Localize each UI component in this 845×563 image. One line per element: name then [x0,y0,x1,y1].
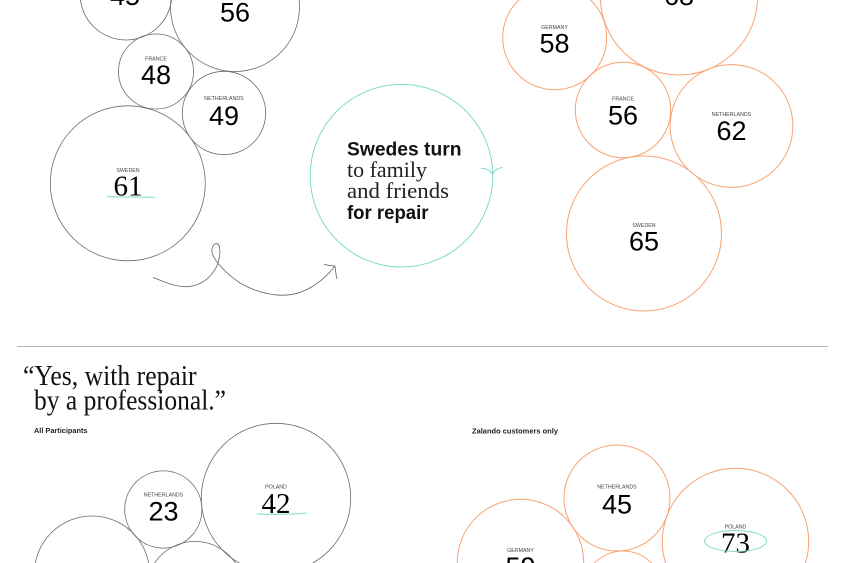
bubble: Netherlands 62 [670,65,793,187]
bubble: 45 [80,0,172,40]
bubble: Sweden 61: SWEDEN [116,168,140,174]
heading: Yes, with repair by a professional [23,361,226,416]
bubble: Poland 73: POLAND [725,525,747,531]
bubble: Netherlands 45: 45 [602,489,632,519]
bubble: Germany 58: GERMANY [541,25,568,31]
bubble: Poland 42: 42 [262,488,290,520]
bubble: France 56: FRANCE [612,96,634,102]
callout: Swedes turn to family and friends for repair: and friends [347,178,449,203]
bubble: Sweden 61 [50,106,205,261]
bubble: France 48 [118,34,194,109]
bubble: Poland 73: 73 [721,528,750,560]
divider [17,346,828,347]
arrow: loop to callout [153,244,337,295]
bubble: Netherlands 23: 23 [148,497,179,527]
bubble: Netherlands 23 [125,471,202,548]
bubble: Netherlands 62: NETHERLANDS [712,112,752,118]
heading: Yes, with repair by a professional: “Yes, with repair [23,361,197,392]
callout: Swedes turn to family and friends for repair [310,84,503,267]
bubble: Poland 42: POLAND [265,485,287,491]
bubble: Sweden 65: 65 [629,226,659,256]
callout: Swedes turn to family and friends for repair: Swedes turn [347,140,462,160]
bubble: 68 [600,0,758,75]
bubble: lower middle [146,541,244,563]
bubble: Netherlands 23: NETHERLANDS [144,493,184,499]
bubble: Netherlands 45 [564,445,670,551]
bubble: France 48: FRANCE [145,56,167,62]
bubble: France 56 [575,62,671,158]
subheading: All Participants: All Participants [34,426,88,435]
panel: professional repair, Zalando customers [457,445,809,563]
panel: friends and family, Zalando customers [503,0,793,311]
bubble: Poland 73 [662,468,809,563]
bubble: 56 [170,0,300,72]
bubble: Sweden 61: 61 [114,170,142,202]
bubble: Netherlands 62: 62 [716,116,747,146]
bubble: France 48: 48 [141,60,171,90]
callout: Swedes turn to family and friends for repair: for repair [347,203,429,224]
bubble: Germany: GERMANY [507,548,534,554]
bubble: Poland 42 [201,423,351,563]
subheading: Zalando customers only: Zalando customers only [472,426,559,436]
heading: Yes, with repair by a professional: by a professional.” [34,385,226,416]
bubble: Netherlands 49: NETHERLANDS [204,96,244,102]
callout: Swedes turn to family and friends for repair: to family [347,157,428,182]
bubble: Germany [457,499,584,563]
bubble: lower left [34,516,150,563]
bubble: lower middle [583,551,663,563]
bubble: Netherlands 49: 49 [209,101,239,131]
bubble: Germany 58: 58 [539,28,570,58]
bubble: Netherlands 45: NETHERLANDS [597,485,637,491]
bubble: Germany 58 [503,0,607,90]
panel: professional repair, all participants [34,423,351,563]
panel: friends and family, all participants [50,0,300,261]
bubble: Sweden 65 [566,156,722,311]
bubble: France 56: 56 [608,100,638,130]
bubble: Netherlands 49 [182,71,266,155]
bubble: Sweden 65: SWEDEN [632,223,656,229]
